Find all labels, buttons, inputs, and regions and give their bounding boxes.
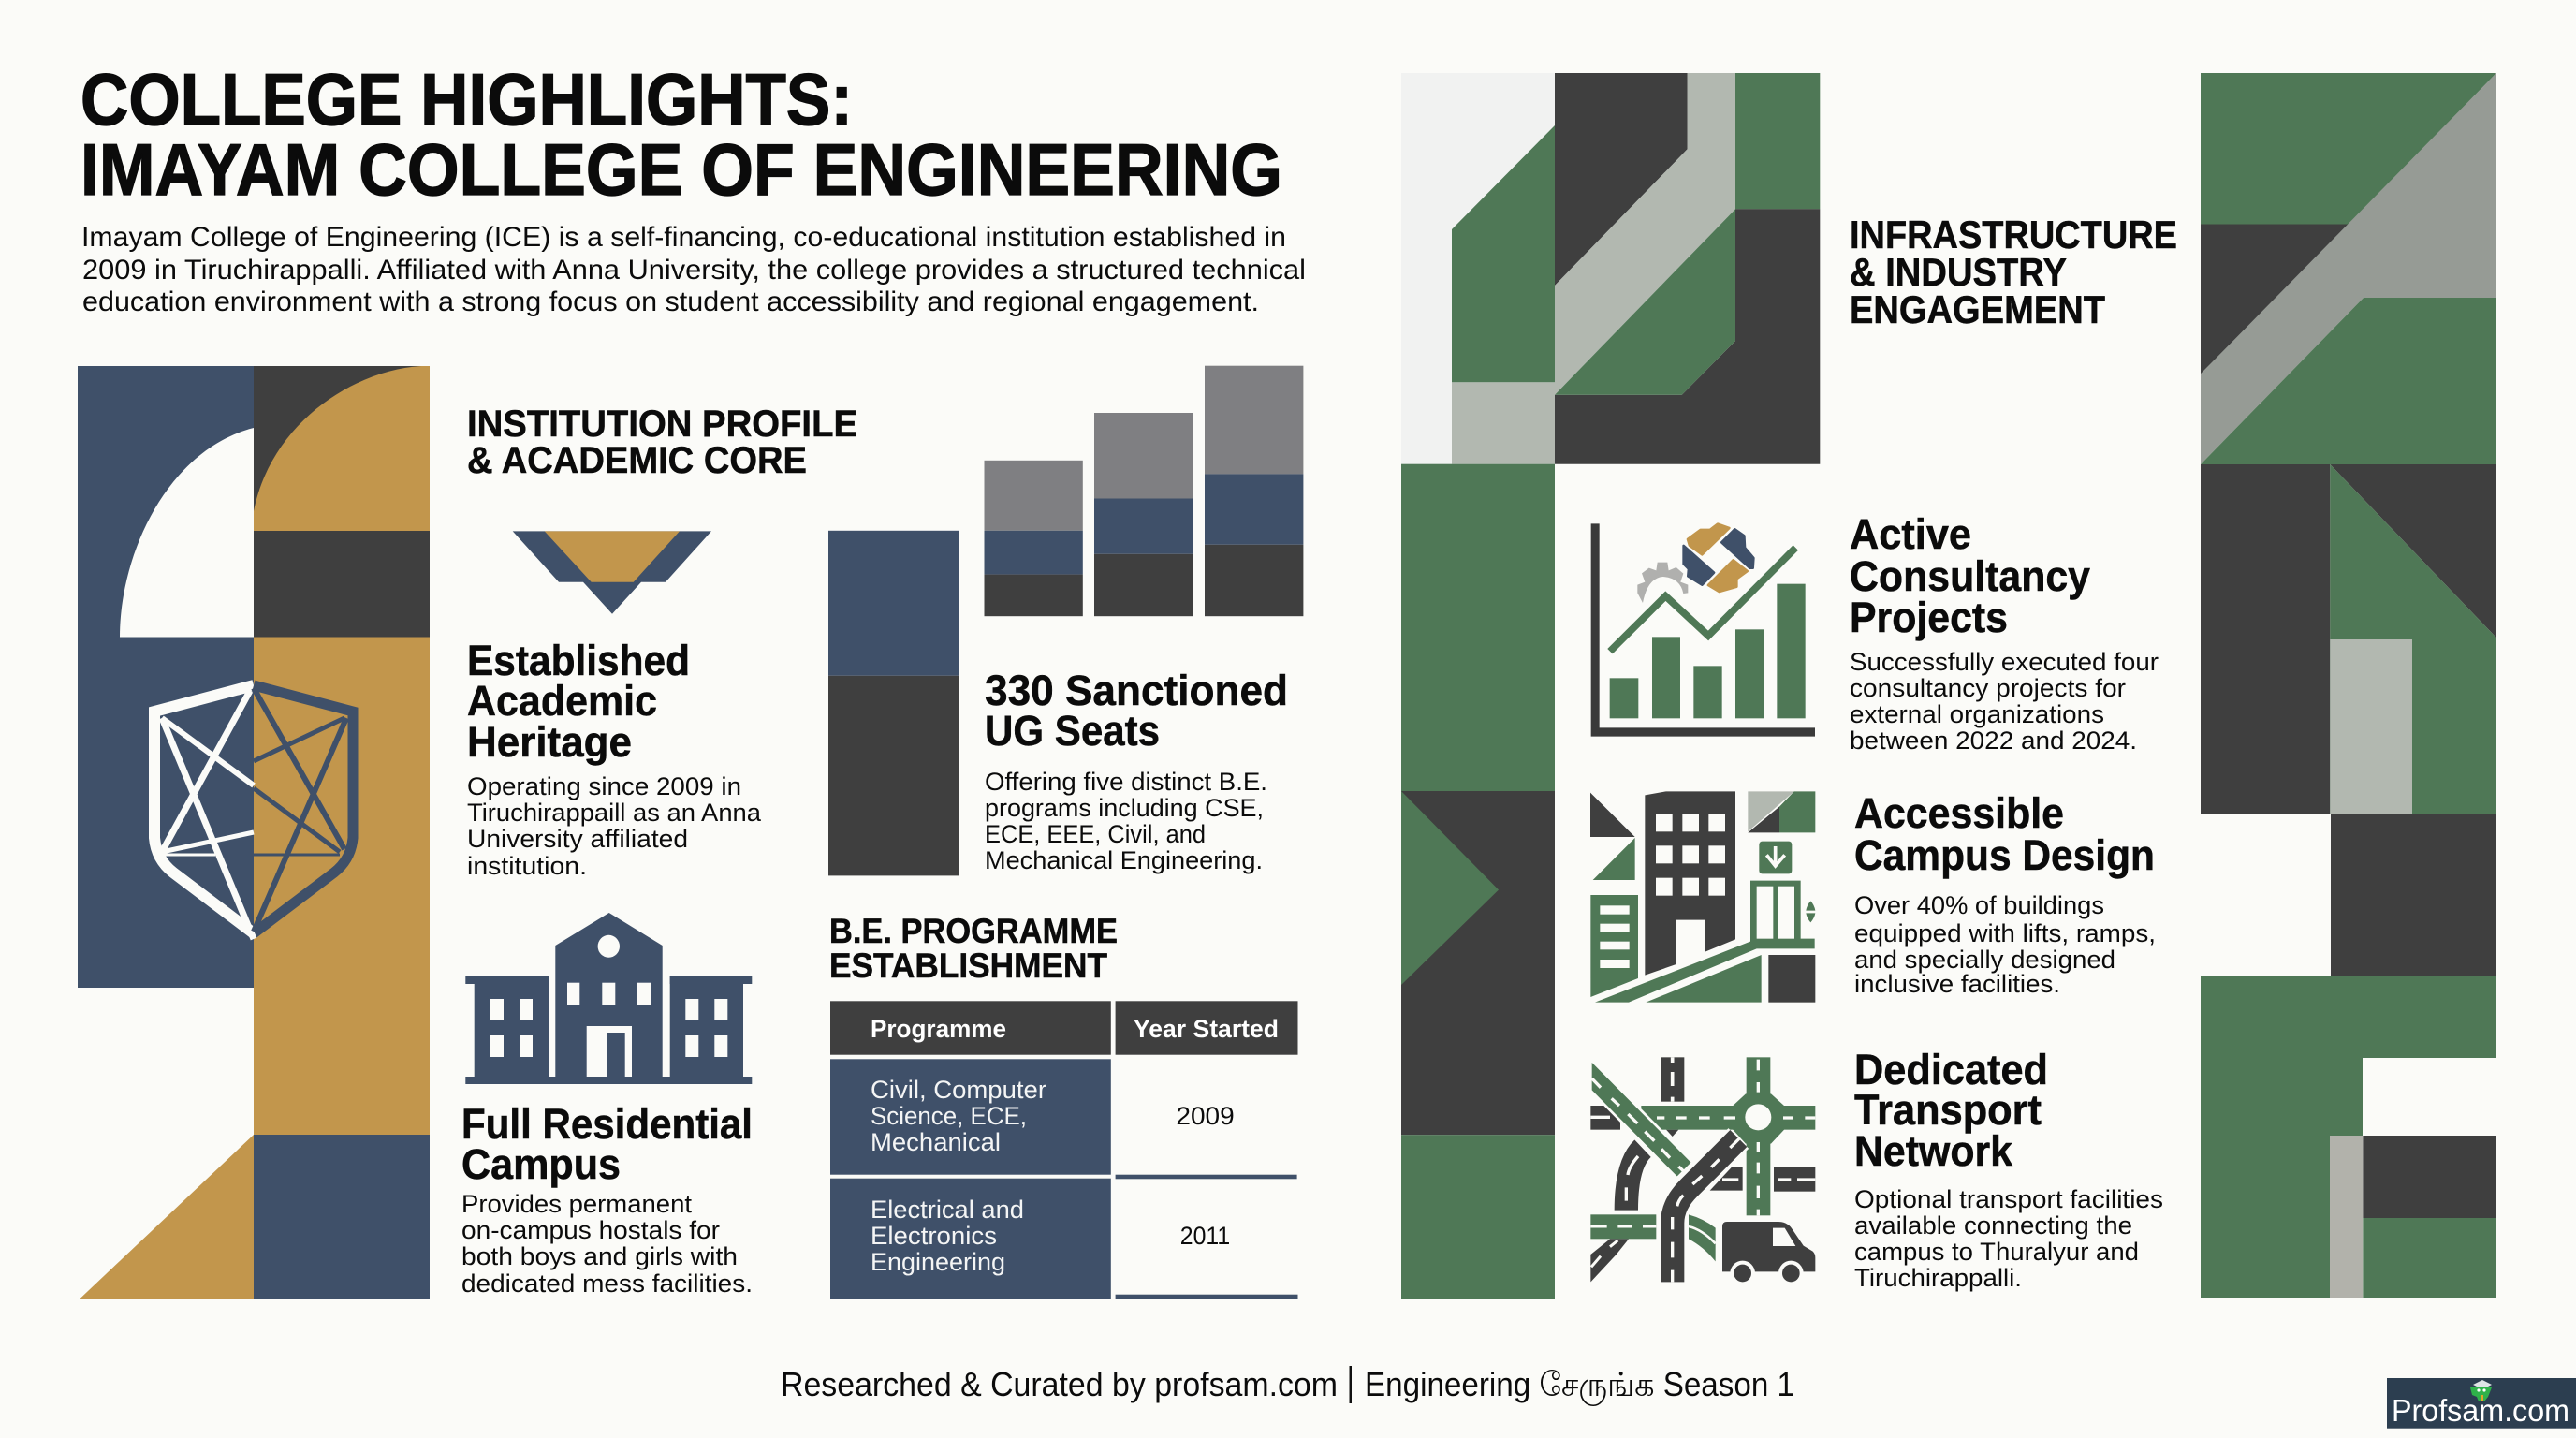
- heading: infrastructure and industry engagement: & INDUSTRY: [1850, 250, 2067, 294]
- heading: institution profile: [467, 404, 857, 481]
- icon: heritage chevron: [513, 531, 711, 614]
- text block: accessible campus design: equipped with lifts, ramps,: [1854, 919, 2156, 947]
- heading: infrastructure and industry engagement: INFRASTRUCTURE: [1850, 213, 2177, 257]
- text block: active consultancy projects: between 2022 and 2024.: [1850, 726, 2137, 755]
- text block: established academic heritage: Tiruchirappaill as an Anna: [467, 799, 762, 827]
- text block: dedicated transport network: available connecting the: [1854, 1211, 2132, 1240]
- table: programme and year started: Mechanical: [871, 1128, 1001, 1156]
- table: programme and year started: [830, 1001, 1297, 1299]
- intro paragraph: 2009 in Tiruchirappalli. Affiliated with Anna University, the college provides a structured technical: [82, 255, 1306, 286]
- chart: rising stacked bars: [985, 366, 1303, 616]
- panel: top-right geometric artwork: [1401, 73, 1820, 464]
- text block: accessible campus design: Over 40% of buildings: [1854, 891, 2104, 919]
- text block: dedicated transport network: Tiruchirappalli.: [1854, 1264, 2022, 1292]
- text block: 330 sanctioned UG seats: programs including CSE,: [985, 794, 1264, 822]
- text block: full residential campus: both boys and girls with: [461, 1242, 738, 1270]
- text block: full residential campus: Provides permanent: [461, 1190, 692, 1218]
- footer credit: [781, 1365, 1794, 1406]
- heading: B.E. programme establishment: B.E. PROGRAMME: [829, 912, 1118, 950]
- text block: 330 sanctioned UG seats: 330 Sanctioned: [985, 667, 1288, 714]
- text block: established academic heritage: Operating since 2009 in: [467, 772, 741, 800]
- title: COLLEGE HIGHLIGHTS:: [80, 58, 853, 140]
- text block: established academic heritage: Established: [467, 637, 690, 684]
- text block: dedicated transport network: Network: [1854, 1127, 2013, 1175]
- text block: dedicated transport network: Optional transport facilities: [1854, 1185, 2163, 1213]
- text block: dedicated transport network: Dedicated: [1854, 1046, 2048, 1093]
- icon: owl mascot: [2470, 1380, 2492, 1401]
- text block: full residential campus: Full Residential: [461, 1100, 753, 1148]
- text block: established academic heritage: [467, 637, 762, 880]
- text block: active consultancy projects: consultancy projects for: [1850, 674, 2126, 702]
- heading: institution profile: & ACADEMIC CORE: [467, 440, 807, 481]
- text block: established academic heritage: Heritage: [467, 718, 632, 766]
- panel: left geometric shield artwork: [78, 366, 430, 1299]
- intro paragraph: [81, 222, 1306, 317]
- heading: B.E. programme establishment: ESTABLISHMENT: [829, 946, 1107, 985]
- text block: 330 sanctioned UG seats: Offering five distinct B.E.: [985, 768, 1267, 796]
- chart: tall two-tone bar: [828, 531, 959, 875]
- text block: accessible campus design: and specially designed: [1854, 946, 2115, 974]
- logo: Profsam.com badge: [2387, 1378, 2576, 1429]
- intro paragraph: education environment with a strong focus on student accessibility and regional engagement.: [82, 286, 1259, 317]
- text block: established academic heritage: institution.: [467, 852, 587, 880]
- text block: established academic heritage: Academic: [467, 677, 657, 725]
- table: programme and year started: Science, ECE,: [871, 1102, 1027, 1130]
- text block: accessible campus design: Campus Design: [1854, 831, 2155, 879]
- title: [80, 58, 1282, 211]
- table: programme and year started: 2009: [1176, 1102, 1235, 1130]
- text block: 330 sanctioned UG seats: [985, 667, 1288, 874]
- panel: left-of-right-column geometric strip: [1401, 464, 1555, 1299]
- text block: active consultancy projects: Successfully executed four: [1850, 648, 2159, 676]
- heading: infrastructure and industry engagement: [1850, 213, 2177, 331]
- table: programme and year started: Electrical and: [871, 1196, 1024, 1224]
- table: programme and year started: Civil, Computer: [871, 1076, 1046, 1104]
- text block: dedicated transport network: Transport: [1854, 1086, 2042, 1134]
- text block: active consultancy projects: Projects: [1850, 594, 2008, 641]
- text block: active consultancy projects: Active: [1850, 510, 1971, 558]
- text block: active consultancy projects: [1850, 510, 2159, 755]
- table: programme and year started: Electronics: [871, 1222, 997, 1250]
- title: IMAYAM COLLEGE OF ENGINEERING: [80, 128, 1282, 211]
- icon: consultancy chart: [1591, 523, 1815, 737]
- text block: established academic heritage: University affiliated: [467, 825, 688, 853]
- heading: institution profile: INSTITUTION PROFILE: [467, 404, 857, 445]
- icon: split shield: [154, 685, 353, 939]
- table: programme and year started: Engineering: [871, 1248, 1005, 1276]
- footer credit: Engineering சேருங்க Season 1: [1365, 1365, 1794, 1406]
- icon: transport road network: [1590, 1057, 1815, 1285]
- icon: residential campus building: [465, 913, 752, 1084]
- text block: dedicated transport network: [1854, 1046, 2163, 1292]
- heading: B.E. programme establishment: [829, 912, 1118, 985]
- text block: 330 sanctioned UG seats: ECE, EEE, Civil, and: [985, 820, 1206, 848]
- table: programme and year started: 2011: [1180, 1222, 1230, 1250]
- intro paragraph: Imayam College of Engineering (ICE) is a self-financing, co-educational institution established in: [81, 222, 1286, 253]
- text block: accessible campus design: Accessible: [1854, 789, 2064, 837]
- text block: 330 sanctioned UG seats: UG Seats: [985, 707, 1160, 755]
- heading: infrastructure and industry engagement: ENGAGEMENT: [1850, 287, 2105, 331]
- footer credit: Researched & Curated by profsam.com: [781, 1365, 1338, 1403]
- text block: full residential campus: on-campus hostals for: [461, 1216, 720, 1244]
- icon: accessible campus building: [1590, 791, 1815, 1003]
- panel: far-right geometric column: [2201, 73, 2496, 1298]
- text block: full residential campus: dedicated mess facilities.: [461, 1269, 753, 1298]
- logo: Profsam.com badge: Profsam.com: [2392, 1393, 2569, 1428]
- text block: accessible campus design: inclusive facilities.: [1854, 970, 2060, 998]
- table: programme and year started: Programme: [871, 1015, 1006, 1043]
- text block: full residential campus: [461, 1100, 753, 1298]
- table: programme and year started: Year Started: [1134, 1015, 1279, 1043]
- text block: active consultancy projects: external organizations: [1850, 700, 2104, 728]
- text block: 330 sanctioned UG seats: Mechanical Engineering.: [985, 846, 1263, 874]
- text block: dedicated transport network: campus to Thuralyur and: [1854, 1238, 2139, 1266]
- text block: full residential campus: Campus: [461, 1140, 621, 1188]
- text block: active consultancy projects: Consultancy: [1850, 552, 2090, 600]
- text block: accessible campus design: [1854, 789, 2156, 998]
